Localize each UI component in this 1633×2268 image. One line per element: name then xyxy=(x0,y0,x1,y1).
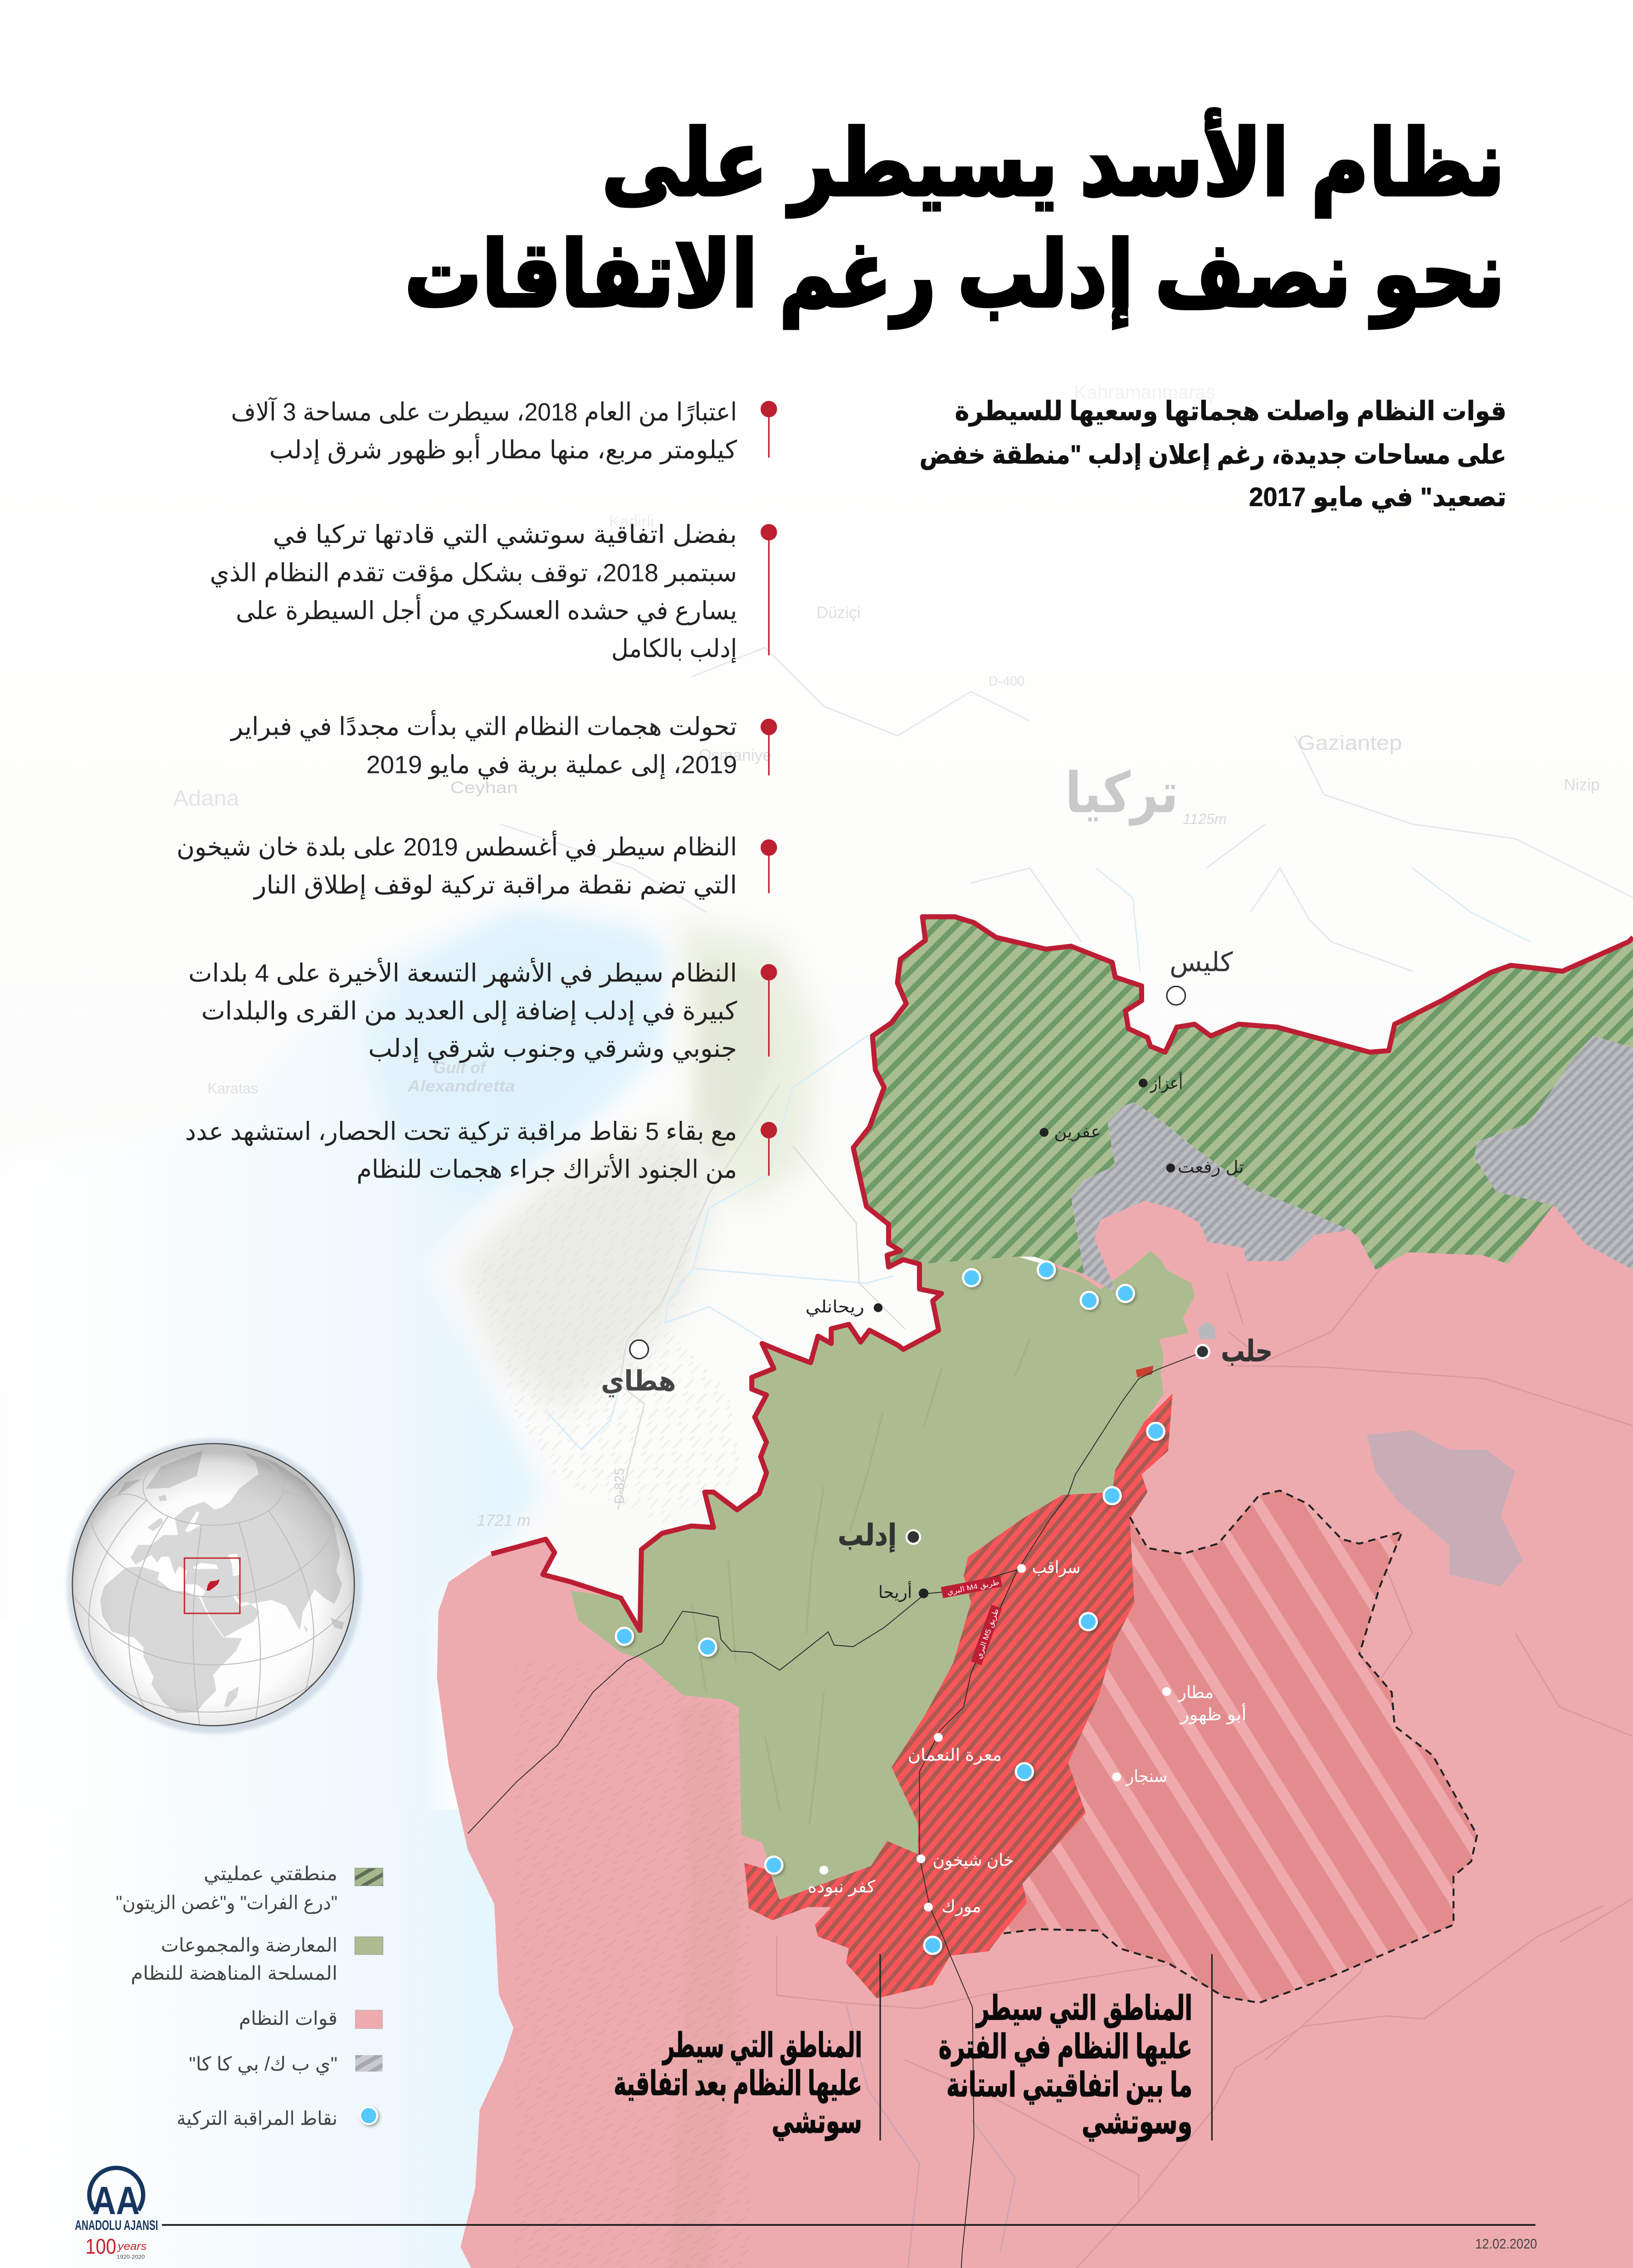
label: Turkey: تركيا xyxy=(1065,762,1179,826)
callout: areas captured between Astana and Sochi xyxy=(939,1954,1212,2142)
M4 road label: طريق M4 البري xyxy=(946,1578,1000,1597)
M5 road label: طريق M5 البري xyxy=(975,1608,1001,1660)
legend: operation zones xyxy=(116,1863,383,1914)
city: Abu al-Duhur airport: مطار xyxy=(1178,1683,1214,1702)
intro paragraph: على مساحات جديدة، رغم إعلان إدلب "منطقة خفض xyxy=(920,440,1506,470)
city: Morek: مورك xyxy=(941,1897,981,1916)
faint base map place names: Kadirli xyxy=(609,512,654,530)
timeline item 5: كبيرة في إدلب إضافة إلى العديد من القرى والبلدات xyxy=(201,997,737,1026)
timeline item 6: مع بقاء 5 نقاط مراقبة تركية تحت الحصار، استشهد عدد xyxy=(185,1117,737,1146)
Anadolu Agency logo: 100 xyxy=(85,2234,116,2258)
faint base map place names: Adana xyxy=(173,786,239,811)
callout: areas captured after Sochi: المناطق التي سيطر xyxy=(662,2026,862,2066)
callout: areas captured between Astana and Sochi: المناطق التي سيطر xyxy=(975,1989,1192,2028)
Turkish-Syrian border line xyxy=(492,917,1633,1630)
region: YPG/PKK east (gray hatching) xyxy=(1474,1036,1633,1270)
title: نظام الأسد يسيطر على xyxy=(602,109,1505,218)
timeline item 4: التي تضم نقطة مراقبة تركية لوقف إطلاق النار xyxy=(253,871,737,900)
timeline item 1 xyxy=(231,397,777,465)
timeline item 5: جنوبي وشرقي وجنوب شرقي إدلب xyxy=(368,1034,737,1063)
timeline item 3: 2019، إلى عملية برية في مايو 2019 xyxy=(366,750,737,779)
timeline item 5 xyxy=(188,958,777,1063)
city: Tel Rifaat: تل رفعت xyxy=(1178,1158,1244,1177)
city: Ariha xyxy=(878,1581,928,1602)
region: opposition and armed groups (green) xyxy=(571,1251,1194,1900)
M4 highway xyxy=(468,1569,1021,1833)
terrain inside regime area xyxy=(515,1266,1633,2268)
region: Euphrates Shield and Olive Branch zones (green hatching) xyxy=(853,917,1633,1274)
timeline item 1: كيلومتر مربع، منها مطار أبو ظهور شرق إدلب xyxy=(269,434,737,465)
dashed boundary of hatched area xyxy=(1002,1491,1477,2003)
city: Saraqib: سراقب xyxy=(1032,1558,1081,1577)
timeline item 3: تحولت هجمات النظام التي بدأت مجددًا في فبراير xyxy=(229,710,737,742)
small red patch near Aleppo xyxy=(1136,1366,1153,1377)
timeline item 6 xyxy=(185,1117,777,1184)
legend: operation zones: "درع الفرات" و"غصن الزيتون" xyxy=(116,1892,337,1914)
faint base map place names: 1721 m xyxy=(477,1511,531,1530)
callout: areas captured after Sochi: عليها النظام بعد اتفاقية xyxy=(614,2064,862,2104)
timeline item 2: سبتمبر 2018، توقف بشكل مؤقت تقدم النظام الذي xyxy=(210,558,737,587)
legend: YPG/PKK: "ي ب ك/ بي كا كا" xyxy=(189,2053,337,2075)
city: Reyhanli xyxy=(805,1297,882,1317)
city: Aleppo: حلب xyxy=(1221,1334,1272,1368)
small gray area north of Aleppo xyxy=(1198,1321,1215,1339)
city: Idlib: إدلب xyxy=(838,1518,897,1552)
legend: opposition: المعارضة والمجموعات xyxy=(161,1935,337,1956)
callout: areas captured between Astana and Sochi: ما بين اتفاقيتي استانة xyxy=(946,2066,1192,2105)
timeline item 4: النظام سيطر في أغسطس 2019 على بلدة خان شيخون xyxy=(176,831,737,862)
intro paragraph: تصعيد" في مايو 2017 xyxy=(1249,482,1506,513)
city: Sinjar: سنجار xyxy=(1125,1767,1167,1786)
faint base map place names: Düziçi xyxy=(816,604,861,622)
legend xyxy=(116,1863,383,2129)
callout: areas captured after Sochi xyxy=(614,1954,880,2141)
timeline item 3 xyxy=(229,710,777,779)
timeline item 5: النظام سيطر في الأشهر التسعة الأخيرة على 4 بلدات xyxy=(188,958,737,988)
faint base map place names: Alexandretta xyxy=(407,1077,515,1095)
city: Reyhanli: ريحانلي xyxy=(805,1297,864,1317)
timeline item 4 xyxy=(176,831,777,900)
Anadolu Agency logo: years xyxy=(117,2240,146,2253)
intro paragraph: قوات النظام واصلت هجماتها وسعيها للسيطرة xyxy=(955,396,1506,427)
Anadolu Agency logo: AA xyxy=(92,2179,140,2223)
Anadolu Agency logo: 1920-2020 xyxy=(117,2254,145,2260)
legend: regime forces: قوات النظام xyxy=(239,2008,337,2029)
title xyxy=(405,109,1505,329)
legend: observation points: نقاط المراقبة التركية xyxy=(176,2107,337,2129)
faint base map place names: Nizip xyxy=(1564,776,1600,794)
timeline item 2: بفضل اتفاقية سوتشي التي قادتها تركيا في xyxy=(273,520,737,549)
city: Abu al-Duhur airport: أبو ظهور xyxy=(1180,1703,1247,1725)
faint base map place names: D-825 xyxy=(613,1468,627,1504)
region: regime forces (pink) xyxy=(437,1163,1633,2268)
terrain streaks in opposition area xyxy=(692,1339,1030,1825)
city: Kafr Nabudah: كفر نبوده xyxy=(808,1877,876,1897)
region: areas taken after Sochi (red stripes) xyxy=(745,1393,1173,1998)
callout: areas captured between Astana and Sochi: عليها النظام في الفترة xyxy=(939,2028,1192,2067)
faint base map place names: 1125m xyxy=(1183,811,1227,827)
city: Kafr Nabudah xyxy=(808,1866,876,1897)
city: Aleppo xyxy=(1196,1334,1272,1368)
city: Khan Sheikhoun: خان شيخون xyxy=(933,1851,1014,1870)
timeline item 2 xyxy=(210,520,777,663)
date: 12.02.2020 xyxy=(1475,2236,1537,2252)
region: hatched areas taken between Astana and Sochi xyxy=(1002,1491,1477,2003)
M5 road label xyxy=(971,1604,1002,1665)
M5 highway xyxy=(920,1352,1202,2268)
locator globe xyxy=(67,1439,362,1734)
footer rule xyxy=(162,2224,1536,2225)
city: Hatay xyxy=(601,1340,676,1398)
faint base map place names: Karatas xyxy=(207,1080,258,1096)
legend: opposition: المسلحة المناهضة للنظام xyxy=(131,1963,337,1984)
intro paragraph xyxy=(920,396,1506,513)
faint base map place names: Gulf of xyxy=(434,1059,487,1077)
M4 road label xyxy=(941,1576,1002,1598)
city: Afrin: عفرين xyxy=(1054,1122,1101,1142)
Anadolu Agency logo: ANADOLU AJANSI xyxy=(75,2218,158,2233)
legend: regime forces xyxy=(239,2008,382,2029)
timeline item 6: من الجنود الأتراك جراء هجمات للنظام xyxy=(356,1154,737,1184)
timeline item 2: إدلب بالكامل xyxy=(611,634,737,663)
faint base map place names: Osmaniye xyxy=(699,746,772,764)
city: Maarat al-Numan: معرة النعمان xyxy=(908,1745,1002,1765)
faint base map place names: Gaziantep xyxy=(1297,731,1402,754)
city: Maarat al-Numan xyxy=(908,1733,1002,1765)
Anadolu Agency logo xyxy=(75,2168,158,2260)
city: Ariha: أريحا xyxy=(878,1581,912,1602)
city: Hatay: هطاي xyxy=(601,1366,676,1398)
city: Azaz: أعزاز xyxy=(1150,1072,1183,1093)
city: Kilis: كليس xyxy=(1170,948,1233,978)
callout: areas captured between Astana and Sochi: وسوتشي xyxy=(1082,2102,1192,2142)
callout: areas captured after Sochi: سوتشي xyxy=(772,2102,862,2141)
city: Kilis xyxy=(1167,948,1233,1005)
faint base map place names: Kahramanmaraş xyxy=(1074,381,1215,403)
faint base map place names: Ceyhan xyxy=(450,779,518,797)
faint base map place names xyxy=(173,381,1600,1530)
timeline item 2: يسارع في حشده العسكري من أجل السيطرة على xyxy=(236,594,737,626)
faint base map place names: D-400 xyxy=(989,675,1025,689)
city: Azaz xyxy=(1139,1072,1183,1093)
region: YPG/PKK around Tel Rifaat (gray hatching) xyxy=(1071,1102,1350,1292)
timeline item 1: اعتبارًا من العام 2018، سيطرت على مساحة 3 آلاف xyxy=(231,397,737,426)
legend: operation zones: منطقتي عمليتي xyxy=(204,1863,337,1885)
city: Morek xyxy=(924,1897,981,1916)
Turkish observation points xyxy=(616,1261,1164,1954)
city: Abu al-Duhur airport xyxy=(1162,1683,1247,1725)
legend: opposition xyxy=(131,1935,383,1984)
